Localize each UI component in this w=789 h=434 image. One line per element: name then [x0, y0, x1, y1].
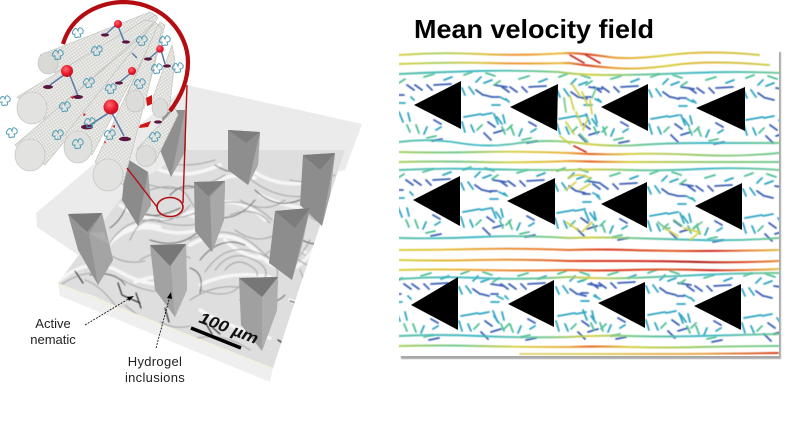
panel shadow	[401, 52, 781, 359]
translucent upper plate	[36, 85, 362, 255]
tube	[92, 15, 158, 79]
pillar centre	[194, 181, 225, 252]
tube	[15, 25, 158, 171]
microtubule bundle	[15, 12, 178, 191]
pillar back-right	[300, 153, 335, 226]
active nematic texture layer	[58, 150, 345, 368]
tube	[64, 22, 160, 163]
label: hydrogel inclusions: Hydrogel	[128, 354, 182, 369]
callout ring	[157, 198, 183, 216]
tube	[17, 20, 155, 124]
zoom callout	[63, 2, 188, 216]
velocity streamlines	[399, 52, 779, 354]
scale label: 100 µm	[197, 310, 261, 348]
bottom slab edge	[58, 283, 273, 382]
slab top edge highlight	[60, 285, 273, 369]
arrow	[156, 292, 172, 348]
pillar right-middle	[269, 208, 310, 280]
pillar back-middle	[228, 130, 260, 185]
pillar left-middle	[122, 158, 151, 226]
hydrogel pillars	[68, 110, 335, 351]
motor proteins and crosslinkers	[0, 20, 183, 149]
tube	[93, 22, 165, 191]
label: hydrogel inclusions: inclusions	[125, 370, 185, 385]
pillar front-centre	[150, 244, 187, 317]
callout lines	[127, 85, 187, 207]
label: hydrogel inclusions	[125, 292, 185, 385]
pillar front-right	[239, 277, 278, 351]
pillar back-left	[160, 110, 186, 177]
tube	[136, 108, 178, 166]
label: active nematic: Active	[35, 316, 71, 331]
panel: mean velocity field	[394, 50, 789, 359]
arrow	[85, 296, 134, 325]
velocity vortices	[394, 72, 789, 342]
tube	[126, 25, 162, 112]
pillar front-left	[68, 213, 113, 285]
obstacle triangles	[411, 81, 745, 330]
title: Mean velocity field	[414, 14, 654, 44]
scale bar	[191, 310, 261, 348]
callout arc	[63, 2, 188, 111]
tube	[38, 12, 157, 74]
label: active nematic	[30, 296, 134, 347]
tube	[151, 45, 175, 118]
central flow column	[560, 55, 702, 240]
label: active nematic: nematic	[30, 332, 76, 347]
